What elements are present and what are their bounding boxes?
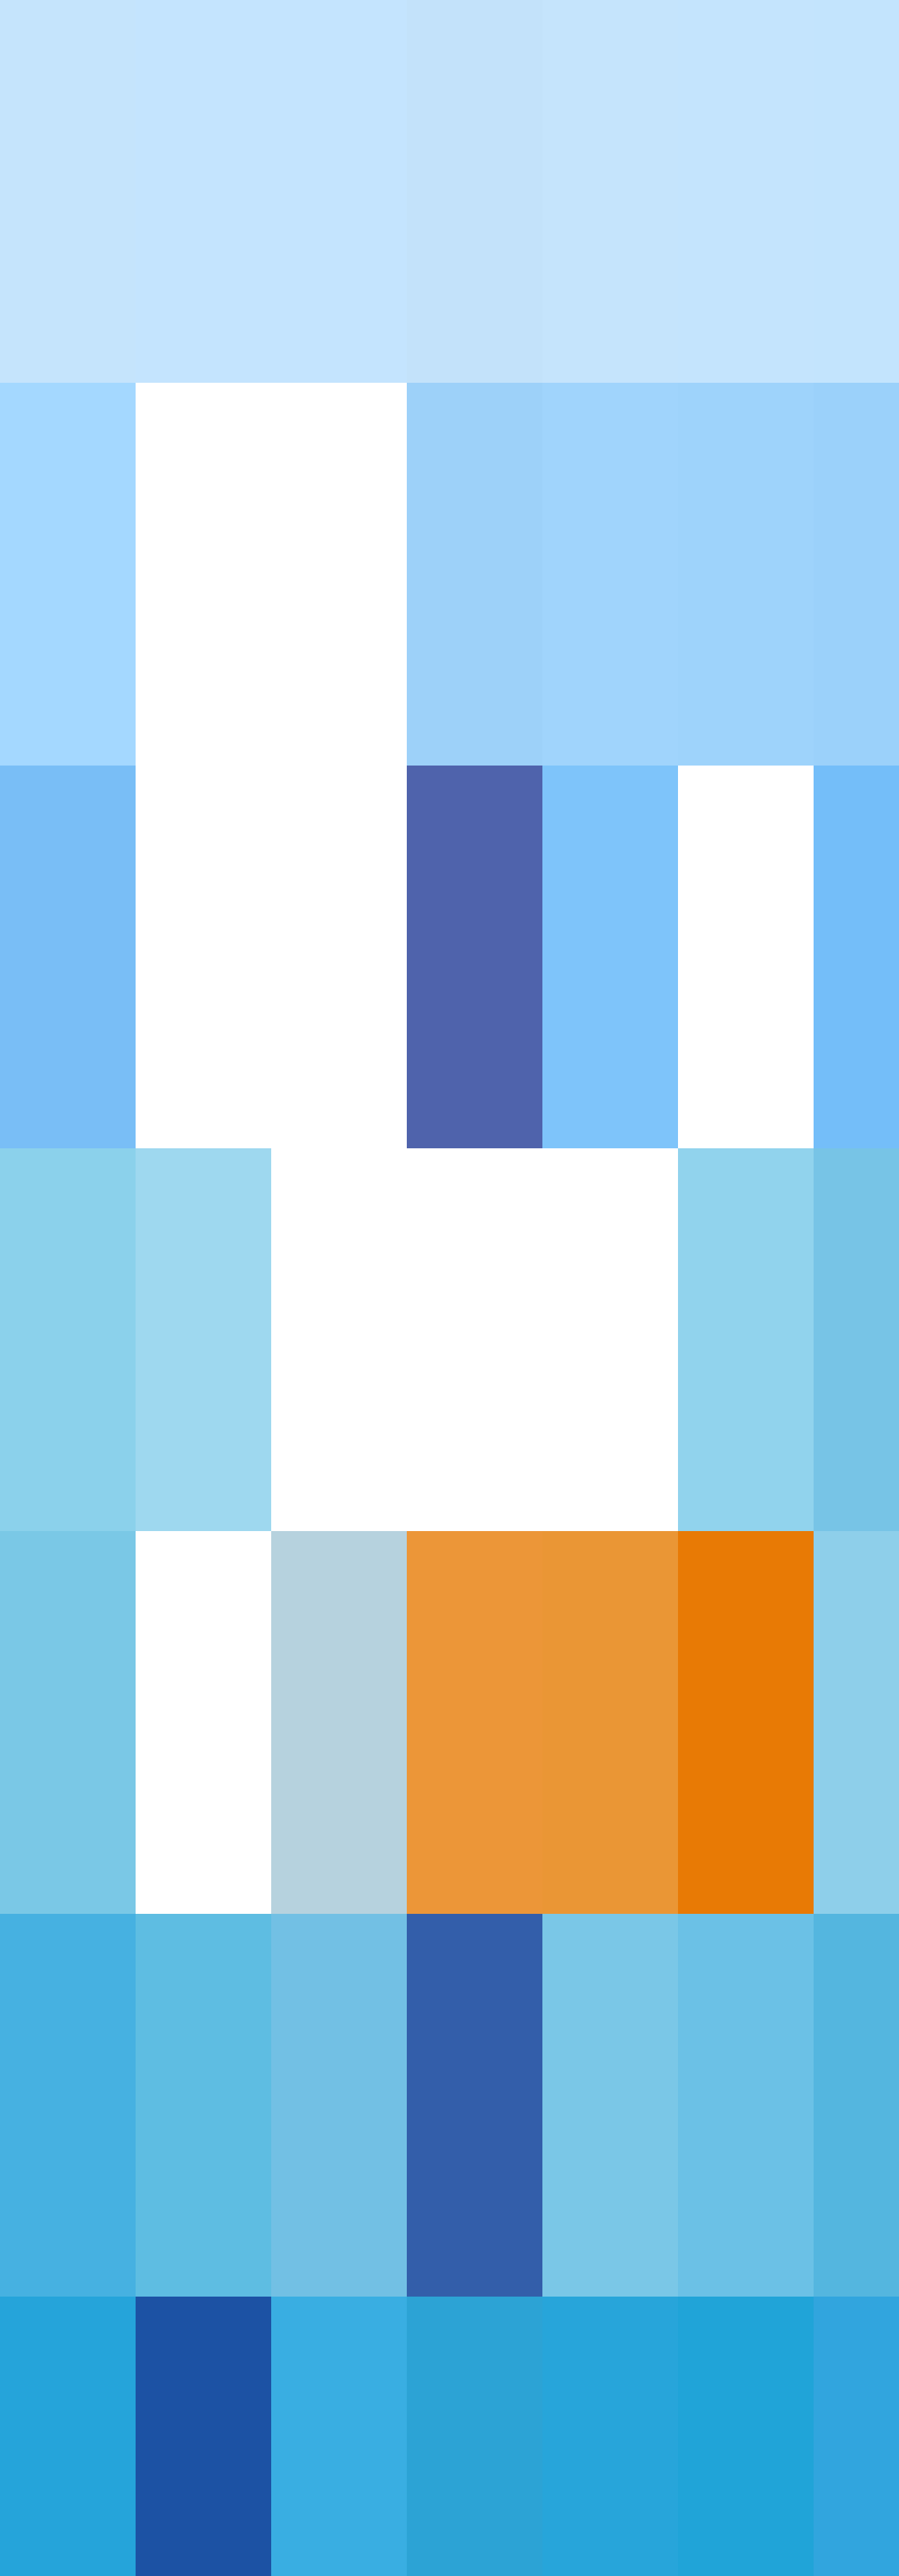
cell 5-3	[271, 1531, 407, 1914]
cell 3-4	[407, 766, 542, 1148]
cell 6-6	[678, 1914, 814, 2297]
cell 5-4	[407, 1531, 542, 1914]
cell 7-4	[407, 2297, 542, 2576]
cell 5-7	[814, 1531, 899, 1914]
row 2: light blue band	[0, 383, 899, 766]
cell 1-3	[271, 0, 407, 383]
cell 2-4	[407, 383, 542, 766]
cell 2-1	[0, 383, 136, 766]
cell 3-7	[814, 766, 899, 1148]
cell 2-2	[136, 383, 271, 766]
row 5: band with orange cells	[0, 1531, 899, 1914]
cell 7-6	[678, 2297, 814, 2576]
row 3: mid blue band with indigo cell	[0, 766, 899, 1148]
cell 7-5	[542, 2297, 678, 2576]
row 7: deep blue band	[0, 2297, 899, 2576]
cell 4-5	[542, 1148, 678, 1531]
cell 5-5	[542, 1531, 678, 1914]
cell 5-1	[0, 1531, 136, 1914]
cell 2-7	[814, 383, 899, 766]
cell 4-4	[407, 1148, 542, 1531]
cell 2-3	[271, 383, 407, 766]
cell 6-7	[814, 1914, 899, 2297]
cell 7-2	[136, 2297, 271, 2576]
cell 4-1	[0, 1148, 136, 1531]
cell 2-5	[542, 383, 678, 766]
cell 2-6	[678, 383, 814, 766]
cell 4-3	[271, 1148, 407, 1531]
cell 7-1	[0, 2297, 136, 2576]
row 4: sky blue band with white centre	[0, 1148, 899, 1531]
cell 3-2	[136, 766, 271, 1148]
cell 1-5	[542, 0, 678, 383]
cell 6-5	[542, 1914, 678, 2297]
cell 6-3	[271, 1914, 407, 2297]
cell 5-6	[678, 1531, 814, 1914]
row 6: cyan blue band with navy cell	[0, 1914, 899, 2297]
cell 3-5	[542, 766, 678, 1148]
cell 3-1	[0, 766, 136, 1148]
cell 1-1	[0, 0, 136, 383]
cell 6-1	[0, 1914, 136, 2297]
cell 4-2	[136, 1148, 271, 1531]
cell 3-3	[271, 766, 407, 1148]
row 1: pale blue band	[0, 0, 899, 383]
cell 4-7	[814, 1148, 899, 1531]
cell 3-6	[678, 766, 814, 1148]
cell 6-4	[407, 1914, 542, 2297]
cell 1-6	[678, 0, 814, 383]
cell 4-6	[678, 1148, 814, 1531]
cell 1-7	[814, 0, 899, 383]
cell 7-3	[271, 2297, 407, 2576]
cell 6-2	[136, 1914, 271, 2297]
cell 5-2	[136, 1531, 271, 1914]
cell 7-7	[814, 2297, 899, 2576]
cell 1-2	[136, 0, 271, 383]
cell 1-4	[407, 0, 542, 383]
